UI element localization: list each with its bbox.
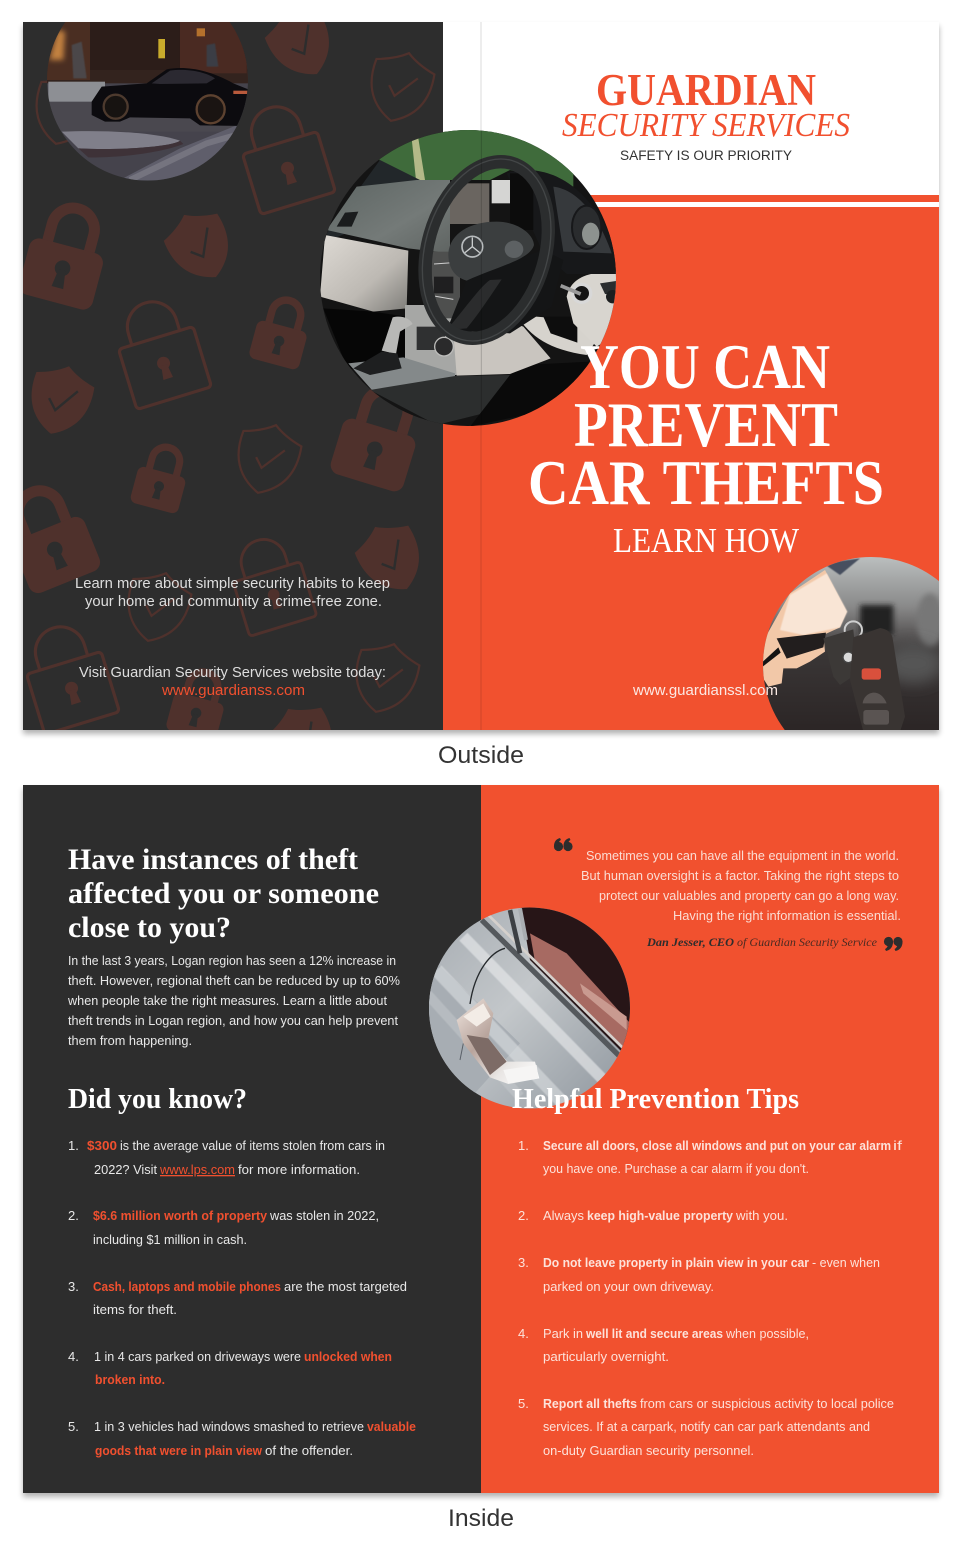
tip 1 xyxy=(518,1138,903,1176)
main headline xyxy=(528,332,884,518)
intro paragraph: them from happening. xyxy=(68,1033,192,1048)
tip 5: Report all thefts xyxy=(543,1396,637,1411)
heading: have instances of theft: Have instances of theft xyxy=(68,843,358,876)
brand title: GUARDIAN xyxy=(596,65,816,115)
panel: outside spread xyxy=(23,22,939,730)
tip 1: Secure all doors, close all windows and put on your car alarm xyxy=(543,1138,891,1153)
beige lower panel xyxy=(454,326,551,376)
tip 5: 5. xyxy=(518,1396,529,1411)
back cover text: www.guardianss.com xyxy=(161,683,305,699)
prevention tips list xyxy=(518,1138,903,1458)
fact 1: 1. xyxy=(68,1138,79,1153)
white accent rule xyxy=(590,202,939,207)
heading: did you know: Did you know? xyxy=(68,1084,247,1115)
panel: inside dark left page xyxy=(23,785,481,1493)
gear lever xyxy=(382,317,413,354)
glovebox xyxy=(320,235,408,312)
fact 3: 3. xyxy=(68,1279,79,1294)
intro paragraph: theft. However, regional theft can be reduced by up to 60% xyxy=(68,973,400,988)
quote text: But human oversight is a factor. Taking the right steps to xyxy=(581,868,899,883)
fact 5: 5. xyxy=(68,1419,79,1434)
panel: inside orange right page xyxy=(481,785,939,1493)
window greenery xyxy=(380,130,574,186)
panel: outside dark back cover xyxy=(23,22,444,730)
image: black sports car at night xyxy=(43,20,253,183)
back cover text xyxy=(75,576,390,699)
tip 2: with you. xyxy=(735,1208,788,1223)
fact 3: are the most targeted xyxy=(284,1279,407,1294)
tip 4 xyxy=(518,1326,809,1364)
steering wheel hub xyxy=(448,222,534,281)
main headline: CAR THEFTS xyxy=(528,448,884,518)
fact 5: goods that were in plain view xyxy=(95,1443,263,1458)
intro paragraph: when people take the right measures. Learn a little about xyxy=(67,993,387,1008)
door handle xyxy=(457,998,539,1084)
caption: outside: Outside xyxy=(438,742,524,769)
white header band xyxy=(443,22,939,195)
brand title xyxy=(562,65,850,163)
window glass xyxy=(520,908,630,1050)
tip 4: particularly overnight. xyxy=(543,1349,669,1364)
tip 2: 2. xyxy=(518,1208,529,1223)
quote opening mark xyxy=(554,838,573,851)
main headline: YOU CAN xyxy=(580,332,830,402)
tip 1: you have one. Purchase a car alarm if you don't. xyxy=(543,1161,809,1176)
tip 4: Park in xyxy=(543,1326,583,1341)
lower spokes xyxy=(450,297,536,334)
heading: have instances of theft: affected you or someone xyxy=(68,877,379,910)
quote text xyxy=(554,838,901,923)
fact 3: items for theft. xyxy=(93,1302,177,1317)
back cover text: Visit Guardian Security Services website today: xyxy=(79,665,386,681)
tip 4: 4. xyxy=(518,1326,529,1341)
fact 4: broken into. xyxy=(95,1372,165,1387)
fact 2 xyxy=(68,1208,379,1247)
right trim xyxy=(567,272,618,347)
fact 1: for more information. xyxy=(238,1162,360,1177)
instrument cluster xyxy=(535,170,616,274)
fact 1: $300 xyxy=(87,1138,117,1153)
quote text: protect our valuables and property can go a long way. xyxy=(599,888,899,903)
tip 2: keep high-value property xyxy=(587,1208,734,1223)
quote text: Having the right information is essential. xyxy=(673,908,901,923)
fact 1 xyxy=(68,1138,385,1177)
window frame xyxy=(327,160,420,237)
quote attribution: Dan Jesser, CEO xyxy=(646,937,734,949)
fact 1: is the average value of items stolen from cars in xyxy=(120,1138,385,1153)
fact 4: unlocked when xyxy=(304,1349,392,1364)
intro paragraph: In the last 3 years, Logan region has seen a 12% increase in xyxy=(68,953,396,968)
back cover text: your home and community a crime-free zone. xyxy=(85,594,382,610)
tip 5 xyxy=(518,1396,894,1458)
tip 3: Do not leave property in plain view in your car xyxy=(543,1255,809,1270)
fact 5 xyxy=(68,1419,416,1458)
tip 1: 1. xyxy=(518,1138,529,1153)
fact 5: 1 in 3 vehicles had windows smashed to retrieve xyxy=(94,1419,364,1434)
intro paragraph: theft trends in Logan region, and how you can help prevent xyxy=(68,1013,398,1028)
key head and blade xyxy=(777,633,826,659)
tip 5: from cars or suspicious activity to local police xyxy=(640,1396,894,1411)
tip 2: Always xyxy=(543,1208,584,1223)
fact 3 xyxy=(68,1279,407,1317)
tip 3: - even when xyxy=(812,1255,880,1270)
centre screen and vents xyxy=(450,183,489,224)
caption: inside: Inside xyxy=(448,1505,514,1532)
heading: have instances of theft: close to you? xyxy=(68,911,231,944)
main headline: PREVENT xyxy=(574,390,838,460)
heading: helpful prevention tips: Helpful Prevention Tips xyxy=(512,1084,799,1115)
brand title: SECURITY SERVICES xyxy=(562,107,850,144)
quote attribution: of Guardian Security Service xyxy=(737,937,877,949)
tip 4: well lit and secure areas xyxy=(585,1326,723,1341)
fact 5: of the offender. xyxy=(265,1443,353,1458)
tip 5: services. If at a carpark, notify can car park attendants and xyxy=(543,1419,870,1434)
brand title: SAFETY IS OUR PRIORITY xyxy=(620,148,792,163)
fact 2: 2. xyxy=(68,1208,79,1223)
dashboard xyxy=(327,180,450,253)
fact 4: 4. xyxy=(68,1349,79,1364)
lower cabin xyxy=(370,375,510,425)
key fob head xyxy=(824,630,854,684)
key fob xyxy=(850,628,905,732)
tip 5: on-duty Guardian security personnel. xyxy=(543,1443,754,1458)
window frame xyxy=(482,920,620,1057)
steering wheel rim xyxy=(418,155,555,345)
fact 2: including $1 million in cash. xyxy=(93,1232,247,1247)
tip 1: if xyxy=(893,1138,903,1153)
footwell xyxy=(324,308,405,370)
key ring xyxy=(845,621,862,639)
image: car interior with steering wheel xyxy=(320,130,616,426)
did you know list xyxy=(68,1138,416,1458)
subheading: learn how: LEARN HOW xyxy=(613,521,799,560)
back cover text: Learn more about simple security habits to keep xyxy=(75,576,390,592)
intro paragraph xyxy=(67,953,400,1048)
fact 3: Cash, laptops and mobile phones xyxy=(93,1279,281,1294)
centre console xyxy=(405,305,457,375)
tip 3 xyxy=(518,1255,880,1294)
tip 4: when possible, xyxy=(725,1326,809,1341)
quote attribution xyxy=(646,937,903,951)
background pattern of locks and shields xyxy=(23,22,436,730)
quote text: Sometimes you can have all the equipment in the world. xyxy=(586,848,899,863)
quote closing mark xyxy=(884,937,903,951)
fact 5: valuable xyxy=(367,1419,416,1434)
fact 4 xyxy=(68,1349,392,1387)
hand xyxy=(760,570,847,687)
fact 4: 1 in 4 cars parked on driveways were xyxy=(94,1349,301,1364)
tip 3: 3. xyxy=(518,1255,529,1270)
fact 2: was stolen in 2022, xyxy=(269,1208,379,1223)
panel: orange front cover xyxy=(443,22,939,730)
front cover website: www.guardianssl.com xyxy=(632,683,778,699)
fact 1: 2022? Visit xyxy=(94,1162,157,1177)
image: chrome car door handle xyxy=(425,903,637,1113)
image: hand holding car key fob xyxy=(763,557,939,730)
door seam xyxy=(470,948,505,1004)
fact 2: $6.6 million worth of property xyxy=(93,1208,268,1223)
panel: inside spread xyxy=(23,785,939,1493)
fact 1: www.lps.com xyxy=(159,1162,235,1177)
tip 2 xyxy=(518,1208,788,1223)
heading: have instances of theft xyxy=(68,843,379,944)
tip 3: parked on your own driveway. xyxy=(543,1279,714,1294)
